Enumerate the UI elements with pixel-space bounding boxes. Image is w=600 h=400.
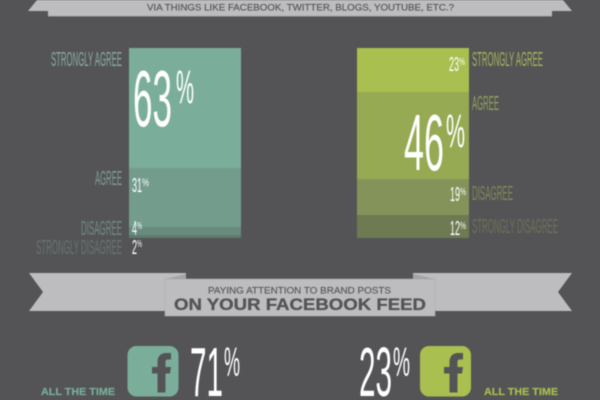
green percentages: 12 <box>450 218 460 240</box>
teal percentages: 31 <box>132 175 142 197</box>
panel: green stacked bar chart <box>357 48 558 240</box>
green category labels: DISAGREE <box>472 183 513 205</box>
green 23 percent <box>359 333 410 400</box>
survey question text: VIA THINGS LIKE FACEBOOK, TWITTER, BLOGS, YOUTUBE, ETC.? <box>147 2 454 14</box>
green category labels: AGREE <box>472 93 499 115</box>
green percentages: 19 <box>450 184 460 206</box>
green percentages: % <box>460 187 466 198</box>
heading line two: ON YOUR FACEBOOK FEED <box>174 295 426 314</box>
green bar segments <box>357 48 469 238</box>
green percentages: % <box>459 57 465 68</box>
panel: teal stacked bar chart: STRONGLY DISAGREE <box>36 237 122 259</box>
green percentages: 46 <box>404 98 444 187</box>
green all the time label: ALL THE TIME <box>484 387 558 398</box>
stat: green 23% all the time <box>359 333 558 400</box>
teal percentages: 63 <box>133 54 172 143</box>
green percentages <box>404 54 466 240</box>
panel: teal stacked bar chart: AGREE <box>95 168 122 190</box>
icon: teal facebook <box>128 346 178 396</box>
icon: green facebook <box>420 346 471 396</box>
teal 71 percent <box>190 333 240 400</box>
panel: teal stacked bar chart: STRONGLY AGREE <box>51 49 122 71</box>
teal bar segments <box>129 48 241 238</box>
green percentages: % <box>460 221 466 232</box>
panel: teal stacked bar chart: % <box>176 60 194 113</box>
green category labels <box>472 49 558 238</box>
panel: teal stacked bar chart <box>36 48 241 259</box>
teal all the time label: ALL THE TIME <box>41 387 115 398</box>
teal percentages <box>132 54 194 259</box>
teal category labels <box>36 49 122 259</box>
teal percentages: % <box>137 239 142 250</box>
panel: green stacked bar chart: % <box>446 104 465 157</box>
top ribbon banner <box>28 0 572 16</box>
stat: green 23% all the time: % <box>393 339 410 385</box>
panel: teal stacked bar chart: DISAGREE <box>81 218 122 240</box>
stat: teal 71% all the time <box>41 333 240 400</box>
teal percentages: 2 <box>132 237 137 259</box>
heading line one: PAYING ATTENTION TO BRAND POSTS <box>208 286 391 296</box>
teal percentages: 4 <box>132 218 137 240</box>
text: % <box>224 339 240 385</box>
teal percentages: % <box>142 177 149 189</box>
teal percentages: % <box>137 221 142 232</box>
section ribbon heading <box>29 273 572 316</box>
green percentages: 23 <box>449 54 459 76</box>
